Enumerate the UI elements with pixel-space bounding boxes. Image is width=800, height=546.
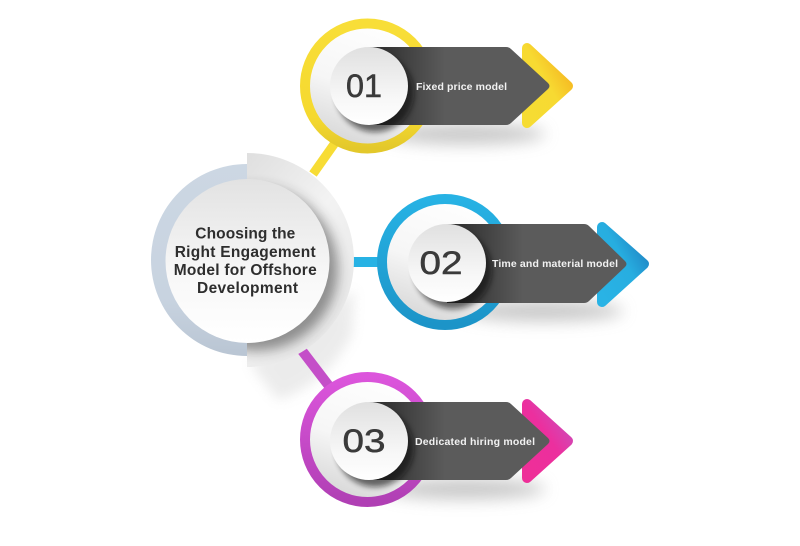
connector: blue — [350, 257, 380, 267]
item 02 — [382, 199, 644, 325]
title: Development — [197, 280, 298, 297]
arrow head — [527, 48, 568, 123]
label bar — [369, 402, 550, 480]
ground shadow — [385, 124, 545, 144]
ring — [305, 377, 430, 502]
ring — [382, 199, 508, 325]
arrow head — [527, 404, 568, 478]
inner disc — [166, 179, 330, 343]
number: 02 — [420, 245, 462, 281]
number: 03 — [342, 423, 386, 459]
title: Choosing the — [195, 226, 296, 242]
title: Right Engagement — [175, 244, 316, 261]
label: Dedicated hiring model — [415, 436, 535, 448]
title: Model for Offshore — [174, 262, 317, 279]
label bar — [447, 224, 626, 303]
label: Time and material model — [492, 258, 618, 270]
label: Fixed price model — [416, 81, 507, 93]
connector: yellow — [313, 140, 337, 174]
ground shadow — [463, 301, 623, 321]
inner disc shadow — [247, 180, 346, 359]
number disc — [330, 402, 408, 480]
number disc — [408, 224, 486, 302]
disc shadow — [336, 409, 414, 487]
connector: purple — [300, 348, 329, 386]
number: 01 — [346, 68, 382, 104]
central circle — [151, 153, 354, 367]
central circle cast shadow — [250, 290, 354, 400]
number disc — [330, 47, 408, 125]
ring — [305, 24, 430, 148]
disc shadow — [336, 54, 414, 132]
label bar — [369, 47, 550, 125]
item 03 — [305, 377, 568, 502]
arrow head — [602, 227, 644, 302]
back ring left half — [151, 164, 247, 356]
ground shadow — [385, 479, 545, 499]
item 01 — [305, 24, 568, 148]
front half disc — [247, 153, 354, 367]
disc shadow — [414, 231, 492, 309]
